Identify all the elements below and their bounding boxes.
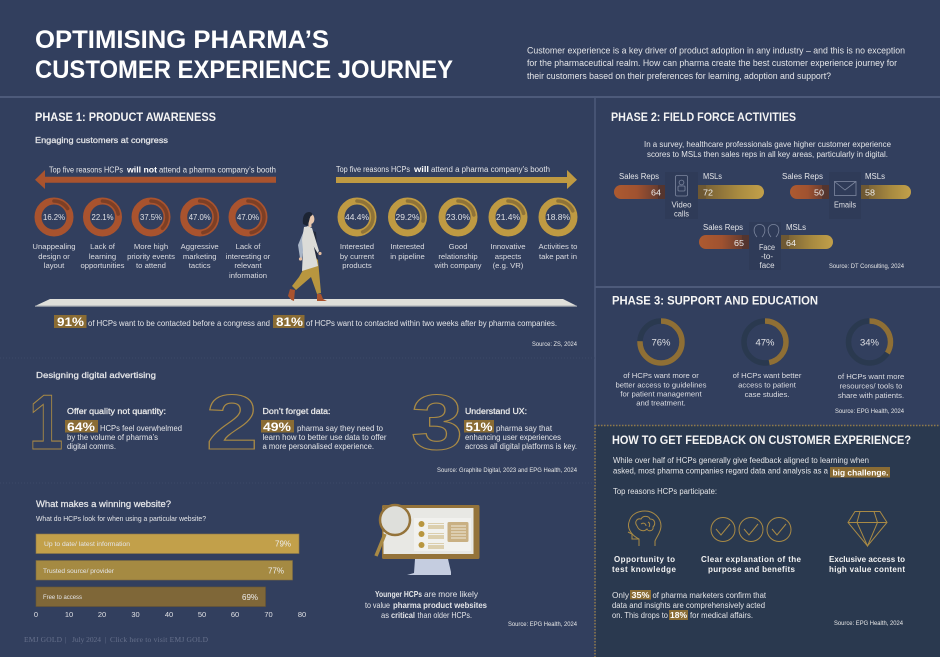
panel: how to get feedback on customer experience [612,433,911,627]
text: younger HCPs: pharma product websites [393,601,487,610]
callout: 91% and 81% contact stats: of HCPs want to be contacted before a congress and [88,319,270,328]
donut chart: 47% case studies: access to patient [738,380,797,390]
source: graphite digital and EPG: Source: Graphite Digital, 2023 and EPG Health, 2024 [437,468,578,474]
bar chart: website attributes: 40 [165,610,173,619]
tip 3: understand UX [411,378,577,466]
donut chart: 23.0% good relationship: Good [449,242,467,251]
comparison: face to face: 65 [734,238,744,248]
comparison: video calls: 64 [651,188,661,198]
callout: 91% and 81% contact stats [54,315,557,329]
donut chart: 44.4% current products [340,201,375,270]
icon: three check marks [711,518,791,542]
donut chart: 23.0% good relationship [434,201,482,270]
tip 2: don't forget data [206,378,387,466]
bar chart: website attributes: 79% [275,538,291,548]
donut chart: 47.0% aggressive marketing: tactics [189,261,211,270]
callout: 91% and 81% contact stats: 91% [57,315,84,329]
donut chart: 47% case studies: case studies. [745,390,789,399]
donut chart: 47% case studies [733,321,802,399]
arrow: will attend: will [413,165,429,174]
donut chart: 18.8% activities: Activities to [539,242,577,251]
callout: 35% and 18%: on. This drops to [612,611,669,620]
donut chart: 47.0% aggressive marketing: marketing [183,252,217,261]
donut chart: 76% guidelines: 76% [651,338,671,348]
donut chart: 16.2% unappealing design: 16.2% [43,213,65,222]
tip 3: understand UX: 3 [411,378,463,466]
donut chart: 21.4% innovative aspects: Innovative [490,242,526,251]
bar chart: website attributes: 69% [242,592,258,602]
tip 3: understand UX: Understand UX: [465,407,527,416]
donut chart: 21.4% innovative aspects [490,201,526,270]
comparison: video calls [614,172,764,219]
tip 1: offer quality [29,378,182,466]
callout: 91% and 81% contact stats: 81% [276,315,303,329]
panel: what makes a winning website [34,499,578,628]
platform walkway [35,299,577,307]
label: exclusive access: high value content [829,565,905,574]
arrow: will attend: attend a pharma company’s booth [431,165,550,174]
comparison: video calls: MSLs [703,172,722,181]
bar chart: website attributes: Up to date/ latest information [44,541,130,548]
comparison: face to face: face [760,261,775,270]
title: CUSTOMER EXPERIENCE JOURNEY [35,56,453,84]
tip 2: don't forget data: Don’t forget data: [262,407,330,416]
footer: July 2024 [72,635,101,644]
intro text [527,46,905,81]
tip 1: offer quality: digital comms. [67,442,116,451]
callout: 35% and 18%: for medical affairs. [690,611,753,620]
label: exclusive access: Exclusive access to [829,555,905,564]
heading: what makes a winning website: What makes a winning website? [36,499,171,509]
donut chart: 47% case studies: of HCPs want better [733,371,802,380]
source: DT consulting: Source: DT Consulting, 2024 [829,264,905,270]
donut chart: 21.4% innovative aspects: (e.g. VR) [493,261,524,270]
tip 3: understand UX: 51% [466,420,493,434]
callout: 35% and 18% [612,590,767,620]
text: younger HCPs: are more likely [424,590,479,599]
donut chart: 47.0% aggressive marketing: Aggressive [181,242,219,251]
callout: 35% and 18%: 18% [670,610,687,620]
feedback intro text: While over half of HCPs generally give feedback aligned to learning when [613,456,869,465]
heading: phase 2: PHASE 2: FIELD FORCE ACTIVITIES [611,110,796,124]
tip 3: understand UX: pharma say that [496,424,553,433]
illustration: walking woman [288,212,327,301]
label: clear explanation: Clear explanation of the [701,555,802,564]
panel: phase 1 product awareness [32,110,578,348]
panel: phase 3 support and education [612,294,905,415]
tip 2: don't forget data: 49% [263,420,291,434]
comparison: emails: 58 [865,188,875,198]
donut chart: 76% guidelines [615,321,707,408]
donut chart: 44.4% current products: 44.4% [345,213,369,222]
arrow: will not attend: attend a pharma company’s booth [159,166,276,174]
donut chart: 21.4% innovative aspects: 21.4% [496,213,520,222]
donut chart: 18.8% activities [539,201,577,261]
text: younger HCPs: critical [391,611,415,620]
donut chart: 34% resources [838,321,904,400]
donut chart: 22.1% lack of learning: opportunities [80,261,125,270]
survey intro text [644,140,892,159]
tip 1: offer quality: by the volume of pharma’s [67,433,158,442]
donut chart: 16.2% unappealing design: layout [44,261,65,270]
label: test knowledge: Opportunity to [614,555,675,564]
tip 1: offer quality: HCPs feel overwhelmed [100,424,182,433]
callout: 35% and 18%: of pharma marketers confirm that [652,591,767,600]
subheading: engaging customers at congress: Engaging customers at congress [35,135,168,145]
donut chart: 16.2% unappealing design: design or [38,252,70,261]
comparison: video calls: calls [674,210,689,218]
tip 3: understand UX: enhancing user experiences [465,433,561,442]
bar chart: website attributes: 30 [131,610,140,619]
comparison: video calls: 72 [703,188,713,198]
donut chart: 47.0% aggressive marketing: 47.0% [189,213,211,222]
bar chart: website attributes: 10 [65,610,73,619]
donut chart: 23.0% good relationship: with company [434,261,482,270]
illustration: monitor with magnifying glass [376,505,480,575]
donut chart: 47.0% lack of interesting information [226,201,271,280]
donut chart: 37.5% higher priority events: to attend [136,261,166,270]
donut chart: 18.8% activities: 18.8% [546,213,570,222]
donut chart: 29.2% pipeline: in pipeline [390,252,425,261]
subheading: designing digital advertising: Designing digital advertising [36,370,156,380]
donut chart: 37.5% higher priority events: 37.5% [140,213,162,222]
tip 2: don't forget data: learn how to better use data to offer [262,433,387,442]
bar chart: website attributes: 77% [268,566,284,576]
arrow: will attend [336,165,577,189]
bar chart: website attributes: 0 [34,610,38,619]
feedback intro text [613,456,890,478]
donut chart: 34% resources: share with patients. [838,391,904,400]
donut chart: 44.4% current products: by current [340,252,375,261]
donut chart: 29.2% pipeline [390,201,425,261]
donut chart: 34% resources: resources/ tools to [840,382,902,390]
text: younger HCPs: Younger HCPs [375,590,422,599]
label: clear explanation [701,555,802,574]
donut chart: 29.2% pipeline: Interested [390,242,425,251]
panel: phase 2 field force activities [611,110,911,270]
donut chart: 76% guidelines: of HCPs want more or [623,371,699,380]
footer: Click here to visit EMJ GOLD [110,635,209,644]
comparison: emails: Sales Reps [782,172,823,181]
bar chart: website attributes: 80 [298,610,306,619]
footer: | [104,635,106,644]
donut chart: 47.0% lack of interesting information: relevant [234,261,263,270]
text: younger HCPs: than older HCPs. [418,611,472,620]
comparison: emails: 50 [814,188,824,198]
donut chart: 37.5% higher priority events: More high [134,242,168,251]
feedback intro text: big challenge. [832,468,888,478]
footer: EMJ GOLD [24,635,63,644]
tip 2: don't forget data: pharma say they need to [297,424,384,433]
donut chart: 37.5% higher priority events [127,201,175,270]
donut chart: 23.0% good relationship: relationship [438,252,478,261]
donut chart: 44.4% current products: Interested [340,242,374,251]
comparison: emails: Emails [834,200,856,210]
text: younger HCPs: as [381,611,389,620]
bar chart: website attributes: 70 [264,610,273,619]
comparison: face to face: Sales Reps [703,223,743,232]
subheading: top reasons: Top reasons HCPs participate: [613,487,717,496]
panel: designing digital advertising [29,370,578,474]
arrow: will not attend: Top five reasons HCPs [49,166,123,174]
heading: phase 1: PHASE 1: PRODUCT AWARENESS [35,110,216,124]
donut chart: 22.1% lack of learning [80,201,125,270]
tip 1: offer quality: Offer quality not quantity: [67,407,166,416]
donut chart: 76% guidelines: for patient management [620,390,702,398]
question text: What do HCPs look for when using a particular website? [36,514,206,523]
panel: how to get feedback background [596,426,940,657]
donut chart: 18.8% activities: take part in [539,252,577,261]
donut chart: 34% resources: 34% [860,338,880,348]
label: exclusive access [829,555,905,574]
text: younger HCPs [365,590,487,620]
heading: phase 3: PHASE 3: SUPPORT AND EDUCATION [612,294,818,308]
donut chart: 23.0% good relationship: 23.0% [446,213,470,222]
donut chart: 37.5% higher priority events: priority events [127,252,175,261]
label: clear explanation: purpose and benefits [708,565,796,574]
comparison: emails: MSLs [865,172,885,181]
survey intro text: In a survey, healthcare professionals gave higher customer experience [644,140,892,149]
donut chart: 29.2% pipeline: 29.2% [396,213,420,222]
tip 3: understand UX: across all digital platforms is key. [465,442,577,451]
donut chart: 47.0% lack of interesting information: interesting or [226,252,271,261]
donut chart: 44.4% current products: products [342,261,372,270]
tip 2: don't forget data: 2 [206,378,258,466]
donut chart: 22.1% lack of learning: 22.1% [92,213,114,222]
comparison: face to face [699,222,833,270]
tip 2: don't forget data: a more personalised experience. [262,442,374,451]
donut chart: 47.0% lack of interesting information: Lack of [236,242,261,251]
heading: feedback: HOW TO GET FEEDBACK ON CUSTOMER EXPERIENCE? [612,433,911,447]
source: EPG health: Source: EPG Health, 2024 [835,409,905,415]
donut chart: 76% guidelines: better access to guidelines [615,380,707,390]
donut chart: 76% guidelines: and treatment. [636,398,686,408]
feedback intro text: asked, most pharma companies regard data and analysis as a [613,466,829,476]
tip 1: offer quality: 64% [67,420,95,434]
tip 1: offer quality: 1 [29,378,63,466]
donut chart: 22.1% lack of learning: Lack of [90,242,116,251]
comparison: face to face: MSLs [786,223,806,232]
survey intro text: scores to MSLs then sales reps in all key areas, particularly in digital. [647,150,888,159]
source: ZS: Source: ZS, 2024 [532,342,578,348]
bar chart: website attributes: 20 [98,610,106,619]
donut chart: 47% case studies: 47% [755,338,775,348]
donut chart: 16.2% unappealing design [32,201,76,270]
source: EPG health: Source: EPG Health, 2024 [834,621,904,627]
label: test knowledge [612,555,677,574]
callout: 35% and 18%: 35% [632,590,650,600]
comparison: face to face: Face [759,243,775,252]
donut chart: 16.2% unappealing design: Unappealing [32,242,76,251]
comparison: emails [782,172,911,219]
source: EPG health: Source: EPG Health, 2024 [508,622,578,628]
arrow: will not attend [35,166,276,189]
donut chart: 47.0% lack of interesting information: 47.0% [237,213,259,222]
bar chart: website attributes: Trusted source/ provider [43,568,115,575]
bar chart: website attributes: 50 [198,610,206,619]
donut chart: 22.1% lack of learning: learning [89,252,116,261]
footer: | [65,635,67,644]
donut chart: 47.0% lack of interesting information: information [229,271,267,280]
text: younger HCPs: to value [365,601,390,610]
title: OPTIMISING PHARMA’S [35,26,329,54]
intro text: their customers based on their preferences for learning, adoption and support? [527,71,831,81]
icon: diamond [848,512,887,546]
comparison: video calls: Sales Reps [619,172,659,181]
bar chart: website attributes [34,534,306,619]
footer [24,635,209,644]
arrow: will attend: Top five reasons HCPs [336,165,410,174]
donut chart: 47.0% aggressive marketing [181,201,219,270]
donut chart: 21.4% innovative aspects: aspects [495,252,521,261]
donut chart: 34% resources: of HCPs want more [838,372,904,381]
callout: 35% and 18%: Only [612,591,629,600]
bar chart: website attributes: Free to access [43,594,83,601]
arrow: will not attend: will not [126,166,157,174]
comparison: face to face: 64 [786,238,796,248]
intro text: Customer experience is a key driver of product adoption in any industry – and this is no exception [527,46,905,56]
bar chart: website attributes: 60 [231,610,239,619]
icon: head with brain [628,511,661,546]
label: test knowledge: test knowledge [612,565,677,574]
comparison: face to face: -to- [761,252,773,261]
callout: 35% and 18%: data and insights are comprehensively acted [612,601,765,610]
callout: 91% and 81% contact stats: of HCPs want to contacted within two weeks after by pharma companies. [306,319,557,328]
intro text: for the pharmaceutical realm. How can pharma create the best customer experience journey for [527,58,897,68]
title [35,26,453,84]
comparison: video calls: Video [672,200,692,210]
